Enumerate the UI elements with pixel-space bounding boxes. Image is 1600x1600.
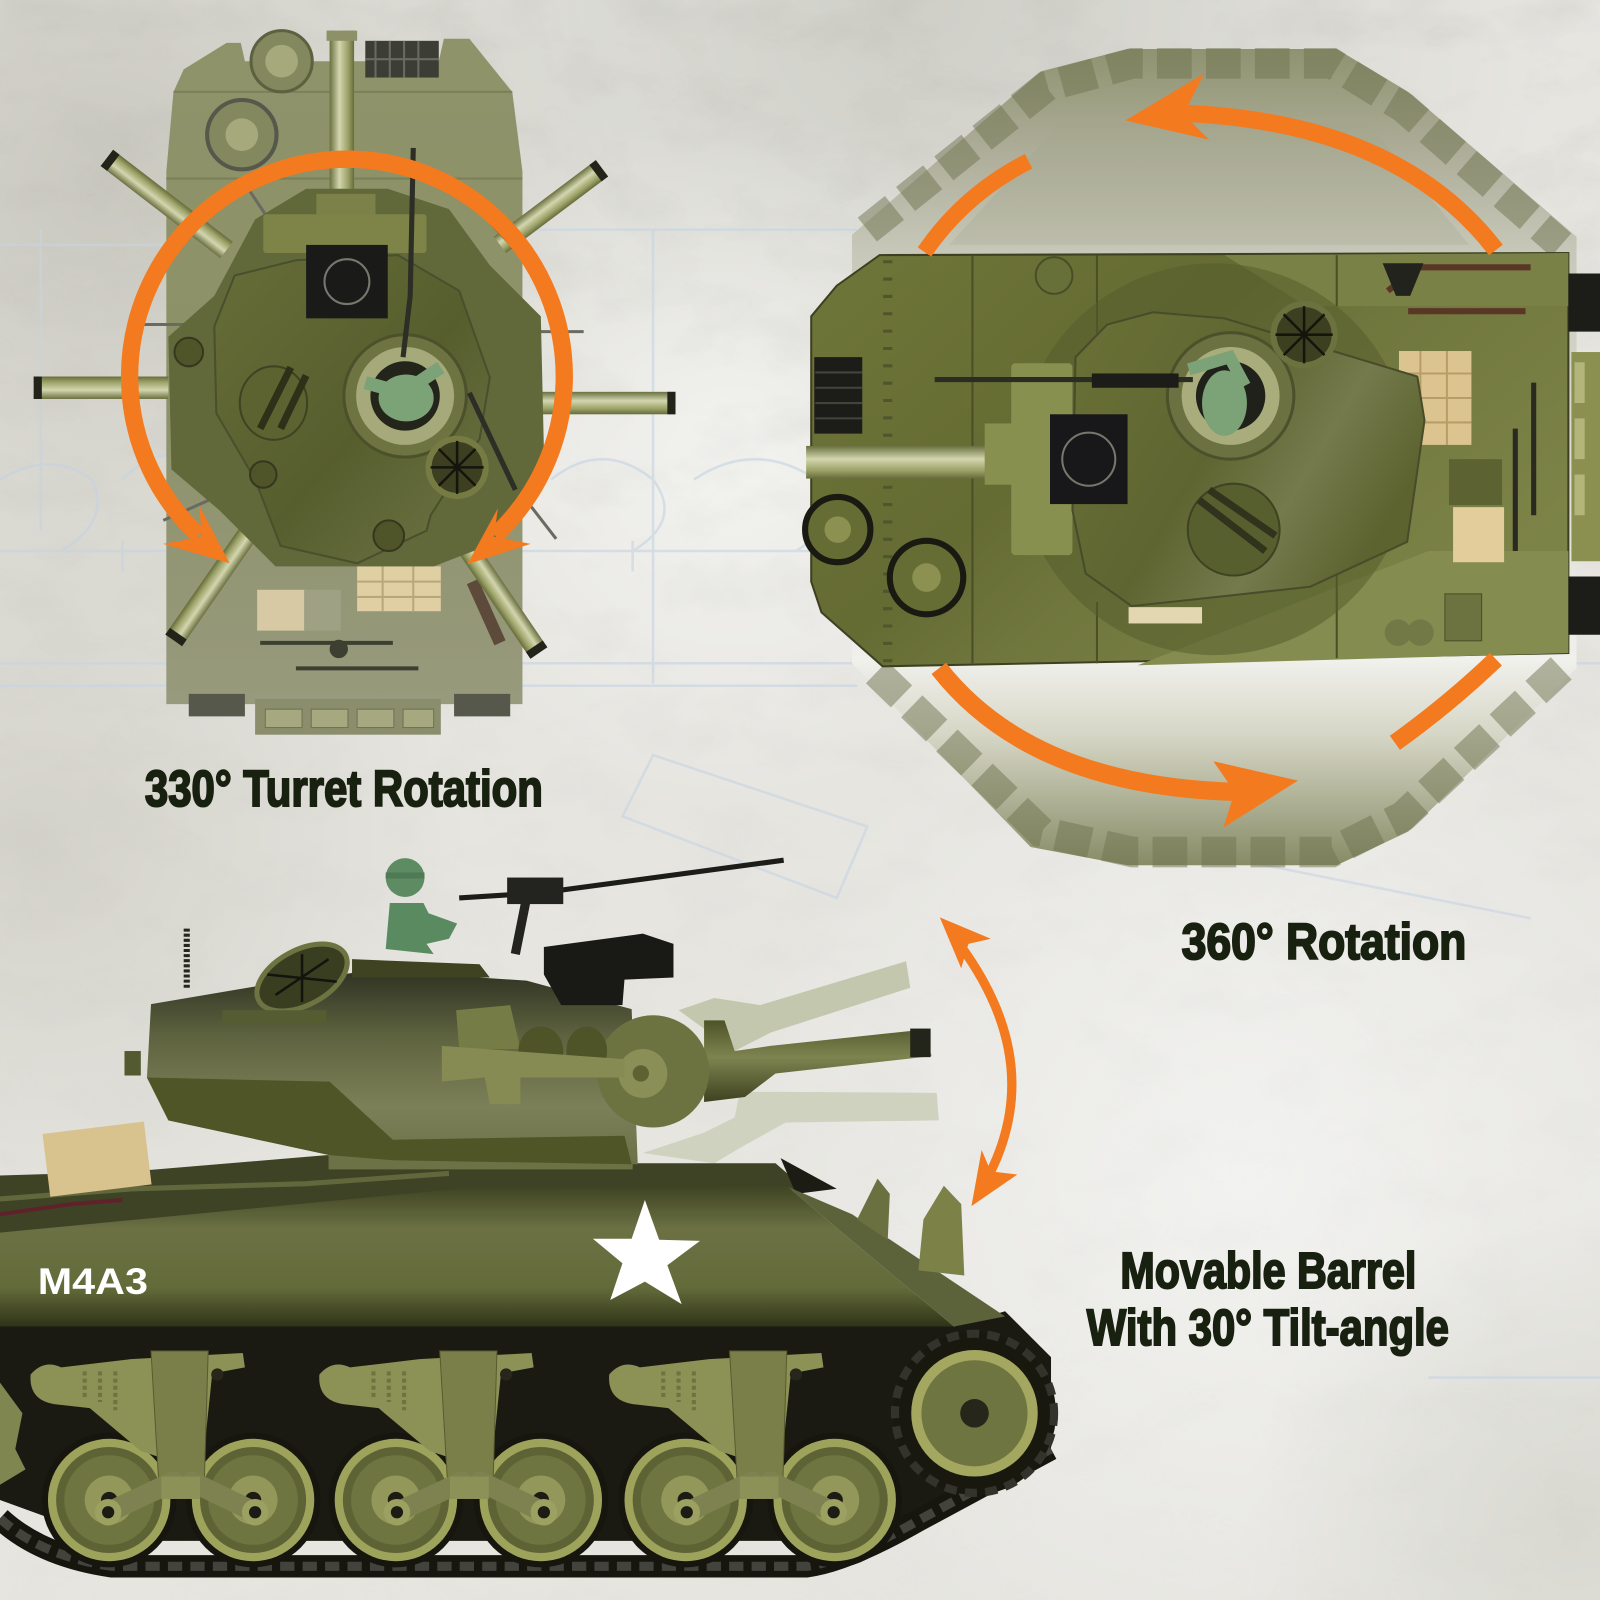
heading: tilt angle: With 30° Tilt-angle	[1087, 1299, 1449, 1356]
spoked wheel	[1273, 304, 1335, 365]
side turret	[124, 970, 709, 1169]
orange swing arrow	[130, 159, 564, 564]
orange arrowheads	[1126, 73, 1298, 828]
ghosted hull seen from above	[166, 31, 522, 735]
idler wheel	[893, 1332, 1056, 1495]
main barrel	[704, 1020, 932, 1102]
orange tilt arrow	[940, 917, 1017, 1206]
sprocket	[0, 1383, 26, 1485]
antenna	[184, 929, 190, 988]
panel: 330 degree turret rotation	[34, 31, 676, 817]
front glacis and tow hooks	[788, 1179, 1005, 1327]
swept turret silhouette	[168, 189, 544, 566]
hatch with soldier	[1167, 333, 1294, 459]
star emblem	[593, 1200, 700, 1304]
road wheels	[42, 1433, 902, 1567]
panel: movable barrel side view	[0, 858, 1449, 1567]
gun barrel pointing left	[806, 363, 1072, 555]
ghost barrels showing elevation	[643, 961, 939, 1163]
panel: 360 degree rotation	[805, 49, 1600, 970]
machine gun	[403, 148, 515, 490]
heading: 330 turret rotation: 330° Turret Rotation	[145, 760, 543, 817]
running gear dark area	[0, 1311, 1051, 1541]
ghosted rotation octagon	[852, 49, 1577, 865]
rear deck	[0, 1122, 837, 1237]
hull side plate	[0, 1187, 954, 1327]
orange circular arrows	[924, 113, 1496, 792]
turret top view	[1072, 312, 1424, 606]
M4A3 label: M4A3	[38, 1261, 148, 1302]
bogie suspension units	[30, 1351, 847, 1526]
tilted spoked wheel	[246, 930, 358, 1025]
heading: 360 rotation: 360° Rotation	[1182, 913, 1466, 970]
machine gun	[459, 860, 784, 954]
spoked wheel	[429, 439, 486, 496]
hatch with soldier	[344, 335, 466, 457]
machine gun and sight	[935, 373, 1280, 576]
top-down hull	[805, 253, 1600, 666]
track	[0, 1449, 1051, 1566]
barrels in swept positions	[34, 31, 676, 659]
heading: movable barrel: Movable Barrel	[1120, 1242, 1416, 1299]
black sight box	[544, 934, 673, 1005]
turret stowage bin	[442, 1005, 624, 1104]
soldier figure	[352, 858, 490, 978]
main turret body	[174, 194, 490, 563]
black box sight	[306, 245, 388, 318]
hull-side turret rail	[222, 1010, 327, 1024]
